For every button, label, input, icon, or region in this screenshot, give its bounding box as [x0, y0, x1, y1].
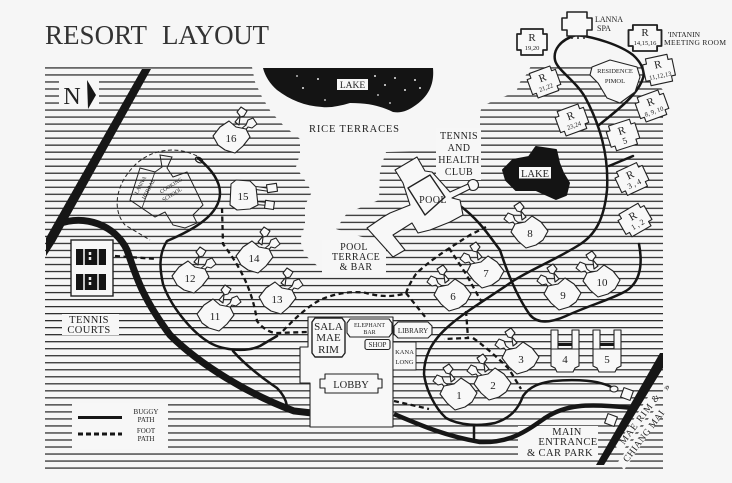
title: LAYOUT	[162, 20, 270, 50]
sala mae rim: RIM	[318, 344, 339, 356]
lobby sign: LOBBY	[333, 380, 369, 391]
villa 7: 7	[483, 268, 489, 280]
spa building	[562, 12, 592, 39]
legend: PATH	[138, 435, 154, 443]
villa 13: 13	[272, 294, 283, 306]
lanna building: SCHOOL	[162, 186, 184, 204]
library: LIBRARY	[398, 327, 428, 335]
villa 13	[259, 268, 303, 314]
villa 14	[236, 227, 280, 273]
room block 21,22: R	[537, 71, 549, 85]
villa 15	[230, 180, 278, 210]
room block 14,15,16	[628, 25, 662, 51]
main entrance label: MAIN	[552, 427, 582, 438]
room block 5: 5	[621, 135, 629, 146]
second lake: LAKE	[521, 169, 549, 180]
villa 9	[537, 264, 581, 310]
main entrance label	[527, 427, 598, 459]
north arrow: N	[63, 84, 81, 110]
main road east part	[394, 405, 632, 442]
spa label: SPA	[597, 24, 611, 33]
buggy paths	[160, 35, 644, 438]
tennis and health club label	[438, 131, 480, 178]
lanna building: COOKING	[159, 177, 184, 195]
villa 16: 16	[226, 133, 237, 145]
terrain hatching	[45, 66, 663, 469]
room block 19,20: R	[528, 32, 536, 44]
tennis and health club label: AND	[448, 143, 470, 154]
room block 5	[605, 118, 641, 152]
pool terrace label	[332, 242, 380, 273]
villa 2	[467, 354, 511, 400]
tennis and health club label: CLUB	[445, 167, 473, 178]
spa label: LANNA	[595, 15, 623, 24]
villa 8	[504, 202, 548, 248]
room block 21,22	[525, 65, 563, 99]
villa 3	[495, 328, 539, 374]
room block 1,2: 1 , 2	[629, 217, 646, 232]
room block 11,12,13: R	[653, 58, 663, 72]
villa 10	[576, 251, 620, 297]
rice terraces label: RICE TERRACES	[309, 124, 399, 135]
villa 1	[433, 364, 477, 410]
room block 14,15,16: 14,15,16	[634, 40, 657, 47]
room block 3,4: R	[624, 168, 637, 182]
room block 1,2: R	[627, 209, 640, 224]
highway diagonal	[596, 353, 663, 465]
library	[394, 322, 432, 338]
pool terrace label: & BAR	[340, 262, 372, 273]
villa 11: 11	[210, 311, 220, 323]
villa 4: 4	[562, 354, 568, 366]
legend: FOOT	[137, 427, 156, 435]
room block 3,4: 3 , 4	[626, 177, 643, 191]
legend: BUGGY	[134, 408, 158, 416]
villa 5	[593, 330, 621, 372]
villa 6: 6	[450, 291, 456, 303]
room block 19,20: 19,20	[525, 45, 539, 52]
villa 2: 2	[490, 380, 496, 392]
main entrance label: & CAR PARK	[527, 448, 593, 459]
white gaps around labels	[59, 78, 664, 470]
lanna building: LANNA	[134, 176, 148, 195]
villa 14: 14	[248, 253, 260, 265]
title: RESORT	[45, 20, 148, 50]
residence: PIMOL	[605, 78, 625, 85]
sala mae rim: MAE	[316, 332, 341, 344]
mae rim and chiang mai road label: MAE RIM &	[618, 392, 663, 447]
villa 12: 12	[184, 273, 196, 285]
kana long: LONG	[395, 359, 414, 366]
room block 23,24: 23,24	[566, 120, 583, 132]
villa 3: 3	[518, 354, 524, 366]
villa 15: 15	[238, 191, 249, 203]
room block 5: R	[616, 124, 628, 138]
lobby complex	[300, 317, 393, 427]
mae rim and chiang mai road label	[618, 381, 673, 465]
tennis courts label: COURTS	[67, 325, 111, 336]
room block 23,24	[553, 103, 591, 137]
elephant bar: BAR	[363, 330, 376, 336]
villa 16	[213, 107, 257, 153]
tennis courts label	[67, 315, 111, 336]
shop: SHOP	[369, 341, 387, 349]
sala mae rim	[312, 318, 345, 357]
villa 1: 1	[456, 390, 462, 402]
villa 8: 8	[527, 228, 533, 240]
dashed circle	[117, 150, 197, 240]
villa 6	[427, 265, 471, 311]
tennis courts	[71, 240, 113, 296]
pool terrace label: POOL	[340, 242, 368, 253]
villa 4	[551, 330, 579, 372]
main entrance label: ENTRANCE	[538, 437, 598, 448]
legend: PATH	[138, 416, 154, 424]
thick access road diagonal	[46, 69, 151, 256]
room block 11,12,13	[641, 54, 677, 86]
sala mae rim: SALA	[314, 321, 343, 333]
tennis and health club label: HEALTH	[438, 155, 480, 166]
kana long	[393, 342, 416, 370]
pool complex: POOL	[419, 195, 447, 206]
villa 5: 5	[604, 354, 610, 366]
elephant bar	[347, 319, 392, 337]
mae rim and chiang mai road label: »	[660, 381, 673, 393]
residence	[590, 60, 640, 103]
room block 21,22: 21,22	[538, 82, 554, 94]
intanin meeting room label: 'INTANIN	[668, 30, 701, 39]
pool complex	[367, 157, 478, 257]
lanna building	[130, 155, 203, 228]
room block 23,24: R	[565, 109, 577, 123]
top lake: LAKE	[340, 81, 365, 91]
room block 8,9,10: R	[645, 95, 657, 109]
villa 10: 10	[596, 277, 608, 289]
elephant bar: ELEPHANT	[354, 323, 385, 329]
lanna building: HERBAL	[141, 178, 157, 201]
villa 9: 9	[560, 290, 566, 302]
second lake	[503, 147, 569, 199]
room block 3,4	[613, 161, 651, 197]
intanin meeting room label	[664, 30, 726, 47]
room block 19,20	[517, 29, 547, 55]
tennis courts label: TENNIS	[69, 315, 109, 326]
kana long: KANA	[395, 349, 414, 356]
room block 8,9,10	[633, 89, 671, 123]
villa 12	[172, 247, 216, 293]
room block 11,12,13: 11,12,13	[649, 71, 672, 82]
intanin meeting room label: MEETING ROOM	[664, 38, 726, 47]
foot paths	[115, 208, 521, 409]
tennis and health club label: TENNIS	[440, 131, 478, 142]
room block 1,2	[616, 201, 654, 239]
room block 8,9,10: 8, 9, 10	[644, 105, 665, 119]
spa label	[595, 15, 623, 33]
residence: RESIDENCE	[597, 68, 633, 75]
villa 11	[197, 285, 241, 331]
legend	[78, 408, 158, 443]
room block 14,15,16: R	[641, 27, 649, 39]
north arrow	[63, 80, 96, 110]
villa 7	[460, 242, 504, 288]
top lake	[263, 68, 433, 112]
mae rim and chiang mai road label: CHIANG MAI	[622, 409, 667, 465]
main road	[58, 220, 312, 413]
entrance gate pavilions	[605, 386, 633, 426]
pool terrace label: TERRACE	[332, 252, 380, 263]
